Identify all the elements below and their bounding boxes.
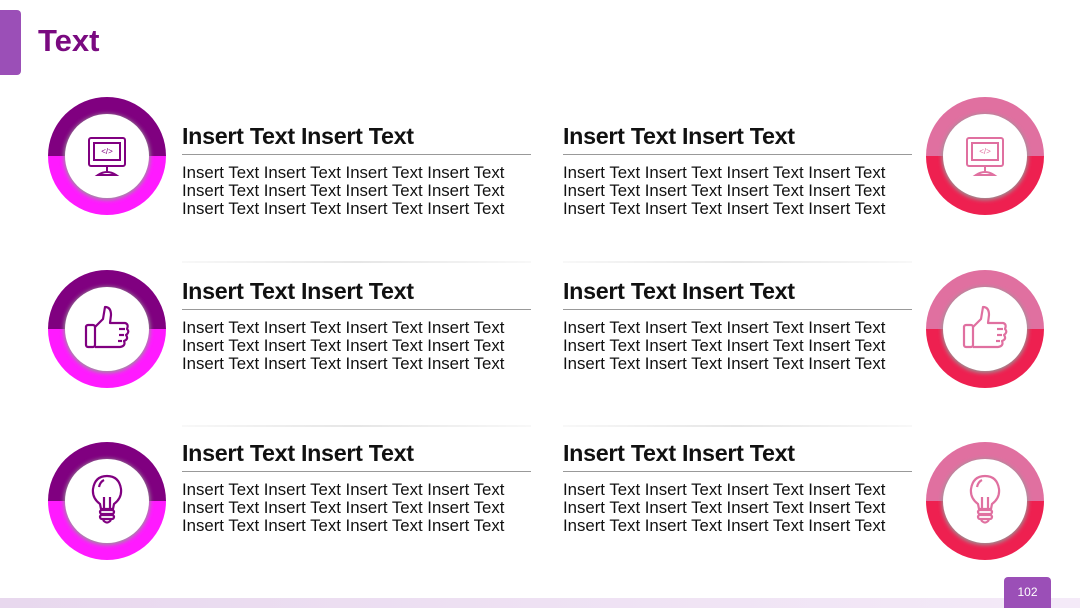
icon: right monitor: </>	[979, 147, 991, 156]
panel: left row 3: Insert Text Insert Text Insert Text Insert Text	[182, 498, 504, 517]
icon: right monitor	[926, 97, 1044, 215]
panel: right row 1: Insert Text Insert Text	[563, 123, 795, 149]
panel: left row 1	[182, 123, 531, 218]
panel: left row 2: Insert Text Insert Text	[182, 278, 414, 304]
panel: left row 2: Insert Text Insert Text Insert Text Insert Text	[182, 318, 504, 337]
panel: right row 1: Insert Text Insert Text Insert Text Insert Text	[563, 163, 885, 182]
icon: left bulb	[48, 442, 166, 560]
panel: right row 2: Insert Text Insert Text Insert Text Insert Text	[563, 318, 885, 337]
footer strip	[0, 598, 1080, 608]
panel: right row 2	[563, 278, 912, 373]
panel: left row 3: Insert Text Insert Text Insert Text Insert Text	[182, 516, 504, 535]
panel: left row 3	[182, 440, 531, 535]
panel: left row 1: Insert Text Insert Text Insert Text Insert Text	[182, 181, 504, 200]
page number	[1004, 577, 1051, 608]
panel: right row 3: Insert Text Insert Text Insert Text Insert Text	[563, 480, 885, 499]
icon: right thumbs up	[926, 270, 1044, 388]
title: Text	[38, 23, 99, 58]
panel: right row 3	[563, 440, 912, 535]
panel: right row 1: Insert Text Insert Text Insert Text Insert Text	[563, 181, 885, 200]
panel: right row 2: Insert Text Insert Text Insert Text Insert Text	[563, 354, 885, 373]
icon: left monitor: </>	[101, 147, 113, 156]
panel: right row 1	[563, 123, 912, 218]
panel: left row 3: Insert Text Insert Text Insert Text Insert Text	[182, 480, 504, 499]
icon: left thumbs up	[48, 270, 166, 388]
page number: 102	[1017, 585, 1038, 599]
panel: left row 2: Insert Text Insert Text Insert Text Insert Text	[182, 336, 504, 355]
circle icons	[48, 97, 1044, 560]
icon: right bulb	[926, 442, 1044, 560]
panel: right row 3: Insert Text Insert Text	[563, 440, 795, 466]
panel: right row 2: Insert Text Insert Text Insert Text Insert Text	[563, 336, 885, 355]
panel: left row 2	[182, 278, 531, 373]
icon: left monitor	[48, 97, 166, 215]
title tab	[0, 10, 21, 75]
panel: left row 1: Insert Text Insert Text Insert Text Insert Text	[182, 199, 504, 218]
panel: left row 3: Insert Text Insert Text	[182, 440, 414, 466]
panel: left row 2: Insert Text Insert Text Insert Text Insert Text	[182, 354, 504, 373]
panel: right row 2: Insert Text Insert Text	[563, 278, 795, 304]
panel: left row 1: Insert Text Insert Text	[182, 123, 414, 149]
panel: right row 3: Insert Text Insert Text Insert Text Insert Text	[563, 516, 885, 535]
panel: left row 1: Insert Text Insert Text Insert Text Insert Text	[182, 163, 504, 182]
panel: right row 3: Insert Text Insert Text Insert Text Insert Text	[563, 498, 885, 517]
panel: right row 1: Insert Text Insert Text Insert Text Insert Text	[563, 199, 885, 218]
